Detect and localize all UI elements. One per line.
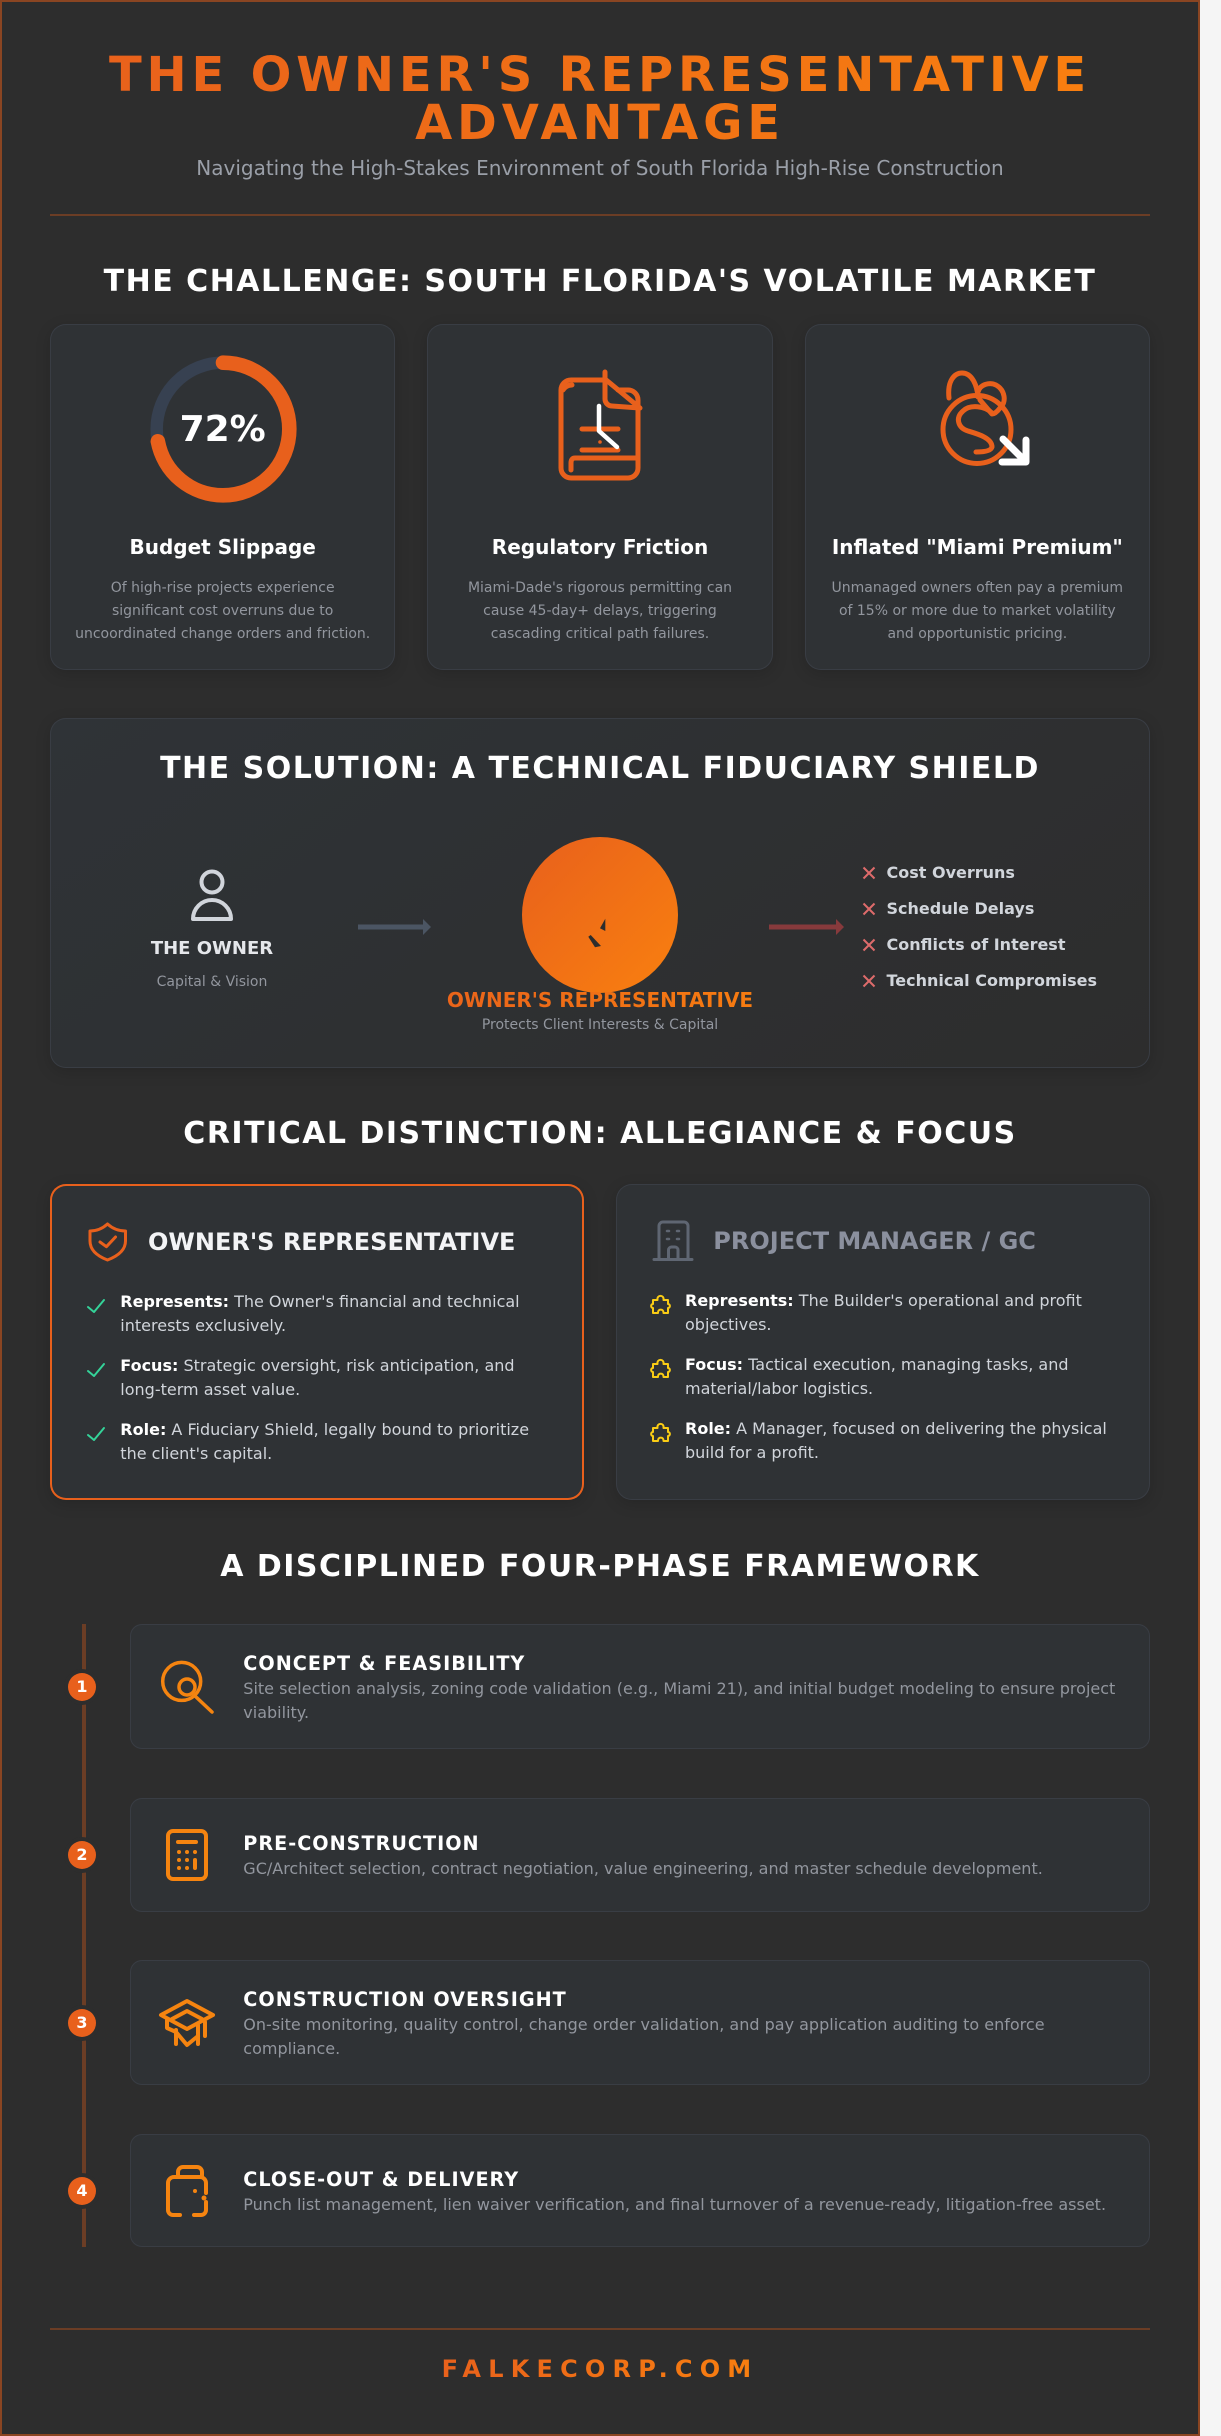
footer: website: FALKECORP.COM <box>442 2355 758 2383</box>
marker 4: 4 <box>76 2181 88 2200</box>
card text: Unmanaged owners often pay a premium <box>832 580 1123 596</box>
card text: cause 45-day+ delays, triggering <box>483 603 717 619</box>
label: owner's representative: OWNER'S REPRESENTATIVE <box>447 988 753 1012</box>
marker 3 <box>68 2009 96 2037</box>
item: represents: Represents: The Owner's financial and technical <box>120 1292 520 1310</box>
icon: puzzle <box>650 1358 671 1378</box>
heading: four-phase framework: A DISCIPLINED FOUR-PHASE FRAMEWORK <box>220 1548 980 1584</box>
card heading: OWNER'S REPRESENTATIVE <box>148 1228 515 1256</box>
icon: calculator <box>166 1829 208 1881</box>
title <box>50 51 1150 147</box>
icon: check <box>87 1427 105 1441</box>
icon: x <box>862 866 876 880</box>
phase text: compliance. <box>243 2038 340 2058</box>
card text: significant cost overruns due to <box>112 603 333 619</box>
marker 2: 2 <box>76 1845 88 1864</box>
phase title: CLOSE-OUT & DELIVERY <box>243 2168 519 2191</box>
item: role: Role: A Manager, focused on delivering the physical <box>685 1418 1107 1438</box>
donut chart: 72% <box>150 355 297 503</box>
icon: x <box>862 902 876 916</box>
panel: phase 3 <box>130 1960 1150 2085</box>
icon: check <box>87 1363 105 1377</box>
subtitle: Navigating the High-Stakes Environment of South Florida High-Rise Construction <box>196 156 1004 180</box>
icon: x <box>862 938 876 952</box>
marker 4 <box>68 2177 96 2205</box>
phase text: viability. <box>243 1702 309 1722</box>
icon: document with clock <box>558 370 642 480</box>
item: represents: objectives. <box>685 1314 771 1334</box>
heading: the solution: THE SOLUTION: A TECHNICAL FIDUCIARY SHIELD <box>160 751 1040 786</box>
icon: puzzle <box>650 1422 671 1442</box>
item: represents: interests exclusively. <box>120 1316 286 1334</box>
phase text <box>243 1678 1115 1722</box>
item: role <box>120 1420 529 1462</box>
item: focus: Focus: Strategic oversight, risk anticipation, and <box>120 1356 515 1374</box>
marker 3: 3 <box>76 2013 88 2032</box>
item: role: build for a profit. <box>685 1442 819 1462</box>
card heading: PROJECT MANAGER / GC <box>713 1226 1036 1254</box>
icon: building <box>652 1220 694 1261</box>
card text <box>75 580 370 642</box>
item: focus: long-term asset value. <box>120 1380 300 1398</box>
item: represents: Represents: The Builder's operational and profit <box>685 1290 1082 1310</box>
panel: owner's representative comparison <box>50 1184 584 1500</box>
stat: 72%: 72% <box>180 409 266 450</box>
item: role: Role: A Fiduciary Shield, legally bound to prioritize <box>120 1420 529 1438</box>
title: ADVANTAGE <box>415 95 785 151</box>
text: protects client interests: Protects Client Interests & Capital <box>482 1017 718 1033</box>
panel: regulatory friction <box>427 324 773 670</box>
item: represents <box>120 1292 520 1334</box>
arrow: representative to risks <box>769 919 844 935</box>
phase text: On-site monitoring, quality control, change order validation, and pay application auditing to enforce <box>243 2014 1045 2034</box>
label: the owner: THE OWNER <box>151 938 273 959</box>
shield circle <box>522 837 678 993</box>
panel: the solution <box>50 718 1150 1068</box>
phase title: CONCEPT & FEASIBILITY <box>243 1652 525 1675</box>
panel: phase 1 <box>130 1624 1150 1749</box>
item: focus <box>685 1354 1068 1398</box>
panel: phase 2 <box>130 1798 1150 1912</box>
phase title: CONSTRUCTION OVERSIGHT <box>243 1988 567 2011</box>
icon: magnifier <box>160 1660 214 1714</box>
icon: shield check <box>88 1222 127 1262</box>
card title: Inflated "Miami Premium" <box>832 535 1123 559</box>
timeline with numbered markers <box>68 1624 96 2247</box>
icon: briefcase lock <box>166 2165 208 2217</box>
heading: the challenge: THE CHALLENGE: SOUTH FLORIDA'S VOLATILE MARKET <box>104 264 1096 299</box>
icon: broken shield fragments <box>588 918 606 948</box>
risk: schedule delays: Schedule Delays <box>886 899 1034 918</box>
phase text: GC/Architect selection, contract negotiation, value engineering, and master schedule development. <box>243 1858 1043 1878</box>
phase text: Site selection analysis, zoning code validation (e.g., Miami 21), and initial budget modeling to ensure project <box>243 1678 1115 1698</box>
panel: budget slippage <box>50 324 395 670</box>
heading: critical distinction: CRITICAL DISTINCTION: ALLEGIANCE & FOCUS <box>183 1116 1017 1150</box>
panel: project manager comparison <box>616 1184 1150 1500</box>
card text: and opportunistic pricing. <box>887 626 1067 642</box>
item: role: the client's capital. <box>120 1444 272 1462</box>
phase text: Punch list management, lien waiver verification, and final turnover of a revenue-ready, litigation-free asset. <box>243 2194 1106 2214</box>
phase text <box>243 2014 1045 2058</box>
card title: Regulatory Friction <box>492 535 708 559</box>
risk: conflicts of interest: Conflicts of Interest <box>886 935 1065 954</box>
icon: money bag with down arrow <box>940 370 1030 466</box>
icon: x <box>862 974 876 988</box>
item: focus: Focus: Tactical execution, managing tasks, and <box>685 1354 1068 1374</box>
card text: cascading critical path failures. <box>491 626 709 642</box>
card text: uncoordinated change orders and friction. <box>75 626 370 642</box>
panel: inflated miami premium <box>805 324 1150 670</box>
item: focus: material/labor logistics. <box>685 1378 873 1398</box>
icon: check <box>87 1299 105 1313</box>
card text: Of high-rise projects experience <box>111 580 335 596</box>
arrow: owner to representative <box>358 919 431 935</box>
icon: stacked graduation cap <box>158 1999 216 2048</box>
item: focus <box>120 1356 515 1398</box>
phase title: PRE-CONSTRUCTION <box>243 1832 480 1855</box>
icon: owner person <box>191 870 233 921</box>
item: role <box>685 1418 1107 1462</box>
marker 1: 1 <box>76 1677 88 1696</box>
card text <box>832 580 1123 642</box>
text: capital and vision: Capital & Vision <box>157 974 267 990</box>
card text: of 15% or more due to market volatility <box>839 603 1116 619</box>
panel: phase 4 <box>130 2134 1150 2247</box>
marker 2 <box>68 1841 96 1869</box>
card text: Miami-Dade's rigorous permitting can <box>468 580 732 596</box>
blocked risks list <box>862 863 1097 990</box>
risk: technical compromises: Technical Compromises <box>886 971 1097 990</box>
title: THE OWNER'S REPRESENTATIVE <box>109 47 1091 103</box>
risk: cost overruns: Cost Overruns <box>886 863 1015 882</box>
item: represents <box>685 1290 1082 1334</box>
card title: Budget Slippage <box>130 535 316 559</box>
card text <box>468 580 732 642</box>
marker 1 <box>68 1673 96 1701</box>
icon: puzzle <box>650 1294 671 1314</box>
